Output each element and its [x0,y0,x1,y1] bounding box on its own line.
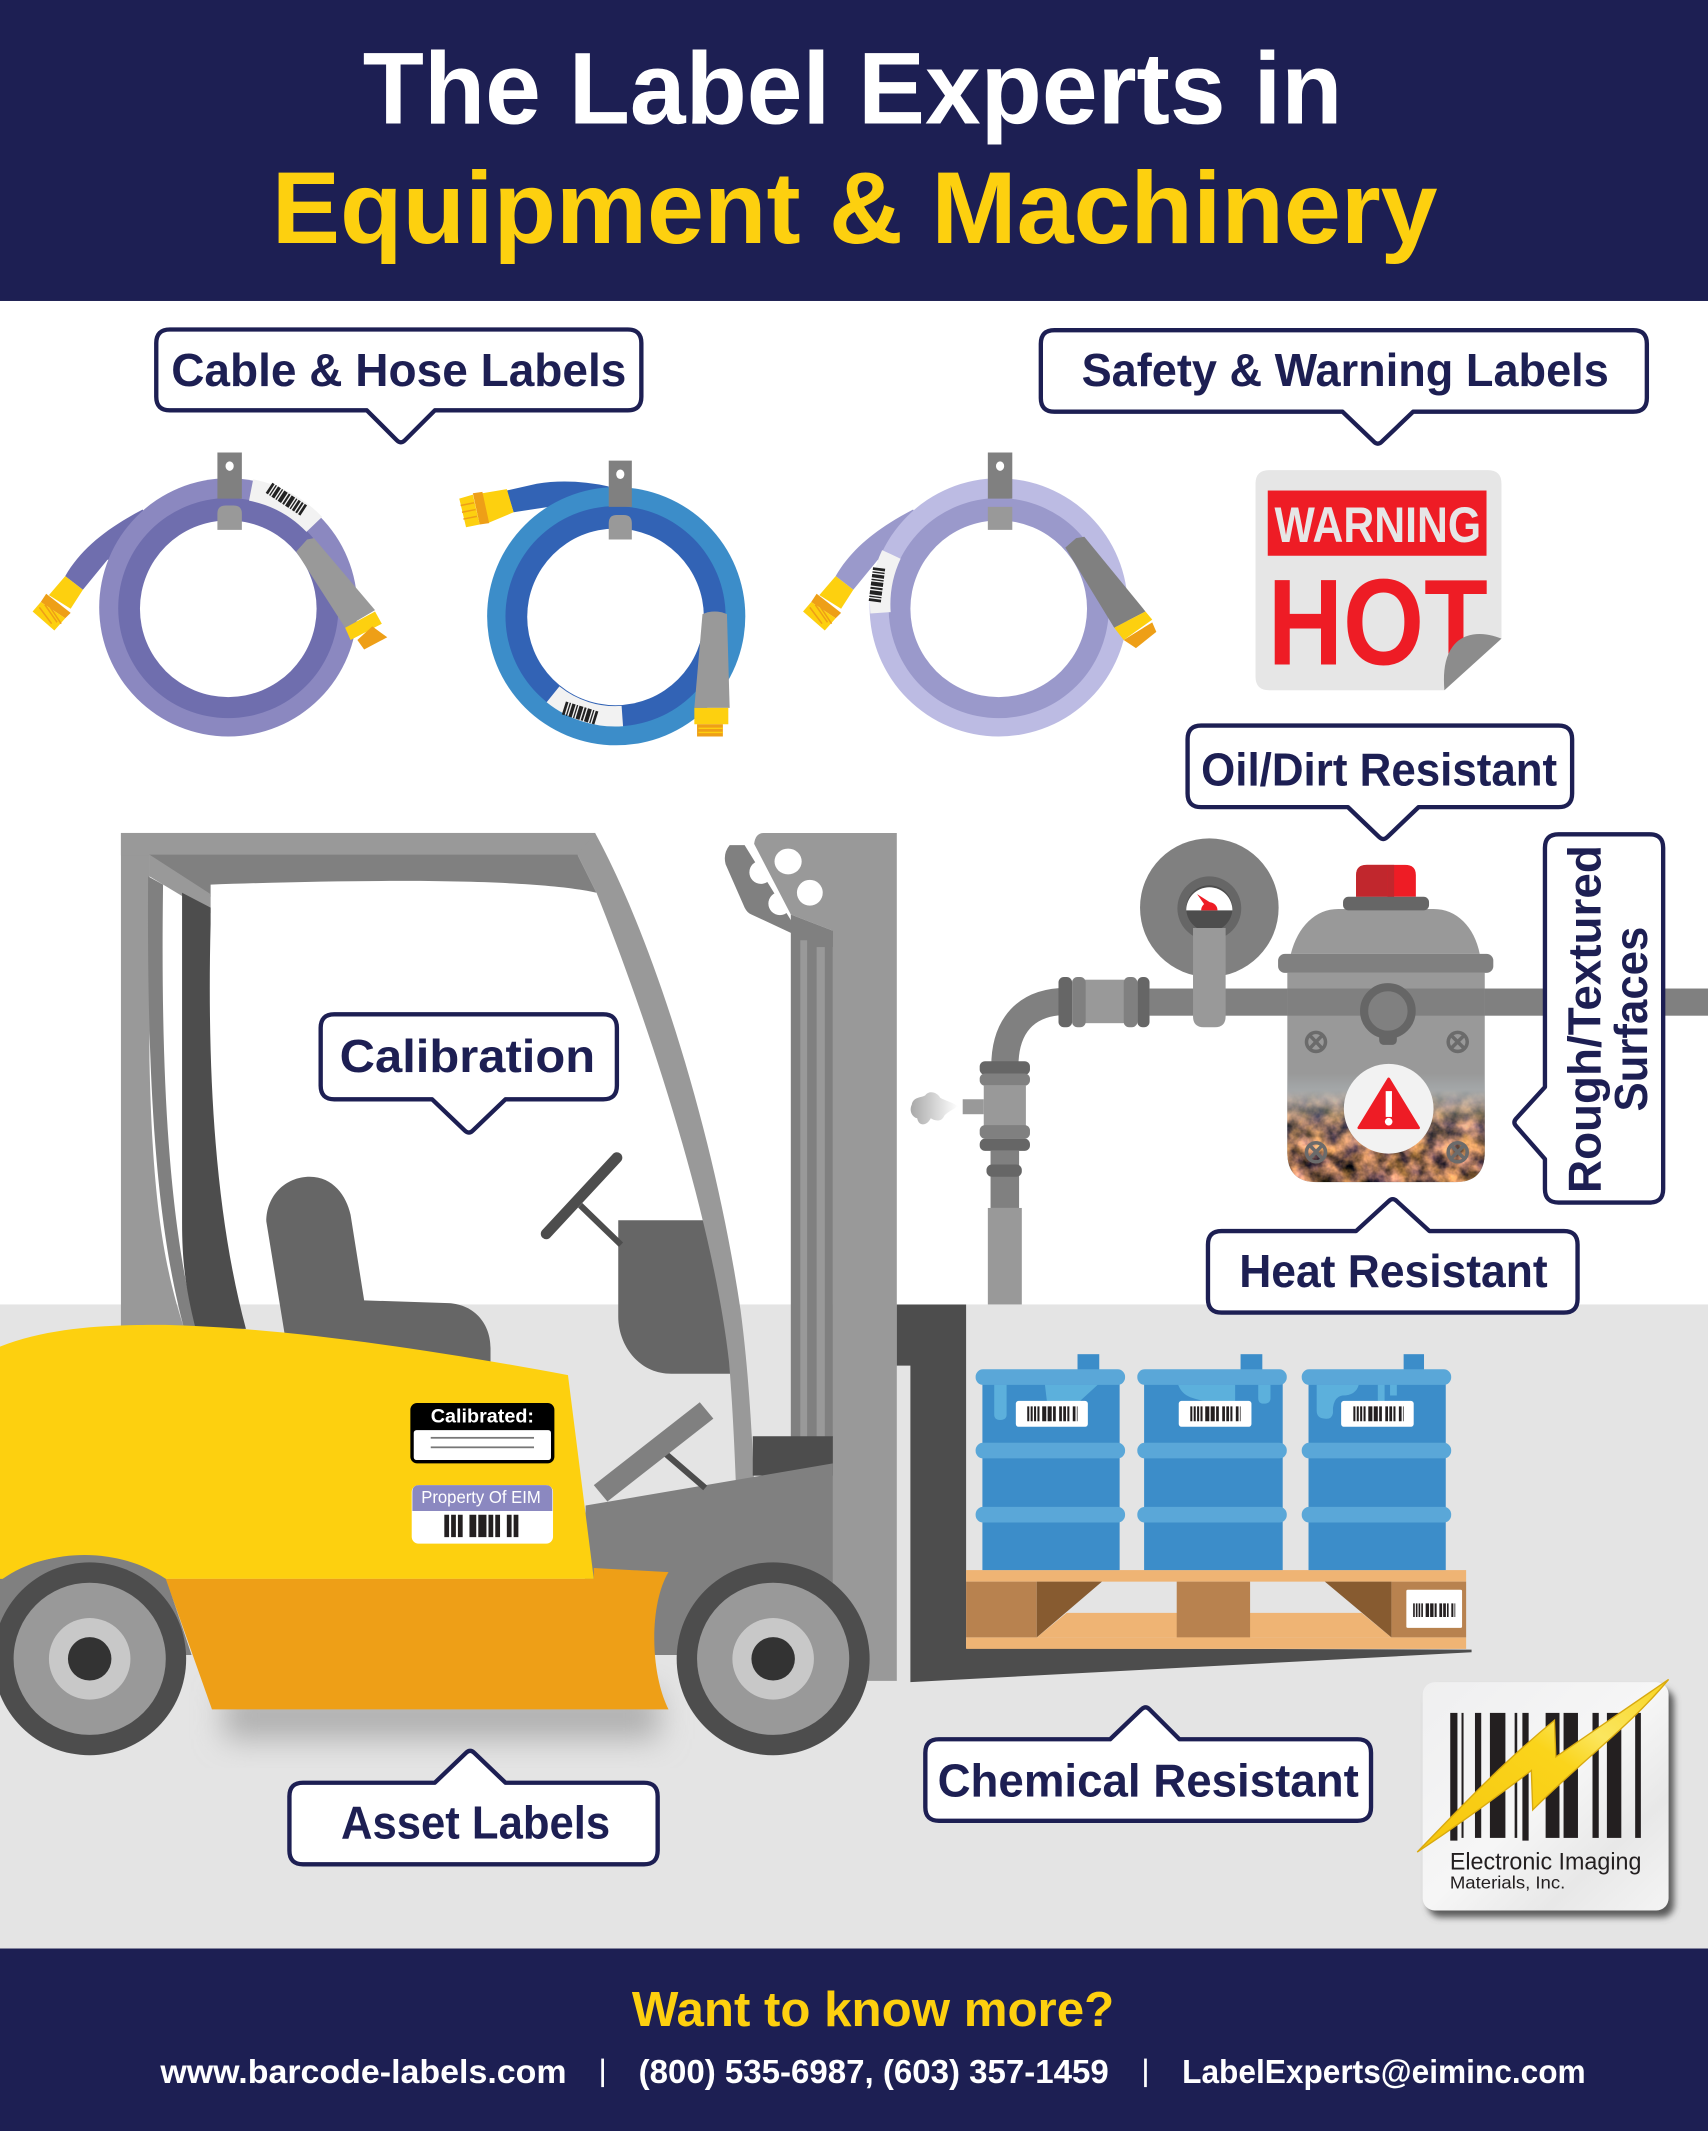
callout: oil and dirt resistant: Oil/Dirt Resistant [1201,743,1557,795]
seat [266,1177,491,1366]
divider 1 [601,2059,604,2087]
calibrated label [410,1403,554,1463]
warning HOT sticker [1256,470,1501,690]
red beacon [1356,865,1416,897]
divider 2 [1144,2059,1147,2087]
barrel 1 [976,1354,1125,1570]
callout: calibration [321,1014,617,1133]
forklift [0,833,897,1755]
wheel arch [0,1553,192,1655]
phone numbers: (800) 535-6987, (603) 357-1459 [639,2054,1109,2091]
front wheel [0,1562,186,1755]
company logo: Materials, Inc. [1450,1873,1565,1893]
title line 1: The Label Experts in [363,32,1342,146]
steam puff [911,1092,958,1124]
cab frame [121,833,754,1484]
email: LabelExperts@eiminc.com [1182,2054,1586,2091]
steam valve [963,1099,984,1114]
title line 2: Equipment & Machinery [272,151,1438,265]
rear wheel [677,1562,870,1755]
warning HOT sticker: WARNING [1275,496,1481,553]
warehouse floor [0,1304,1708,1950]
callout: safety and warning labels: Safety & Warning Labels [1082,344,1609,396]
header banner [0,0,1708,301]
barrel 2 [1137,1354,1287,1570]
pressure gauge [1140,838,1279,1027]
yellow body [0,1325,594,1579]
callout: oil and dirt resistant [1188,726,1572,839]
barrel 3 [1302,1354,1451,1570]
footer heading: Want to know more? [632,1983,1114,2037]
calibrated label: Calibrated: [431,1406,534,1428]
lower body [584,1463,833,1655]
callout: chemical resistant [925,1707,1371,1821]
hose 3: lavender [803,452,1156,736]
ground shadow [224,1692,659,1739]
callout: asset labels: Asset Labels [341,1796,610,1848]
callout: calibration: Calibration [340,1030,595,1082]
tank bolts [1306,1032,1467,1162]
callout: safety and warning labels [1041,330,1647,444]
callout: rough and textured surfaces: Surfaces [1605,927,1657,1111]
foot pedal [594,1402,713,1501]
logo lightning bolt [1417,1679,1669,1852]
callout: asset labels [289,1751,658,1864]
asset label [412,1485,553,1544]
hose 2: blue [459,461,745,745]
logo barcode [1450,1713,1641,1841]
company logo: Electronic Imaging [1450,1849,1641,1876]
orange skirt [166,1568,669,1709]
mast [725,833,897,1681]
callout: rough and textured surfaces: Rough/Textured [1559,845,1611,1193]
footer banner [0,1949,1708,2131]
steering column housing [618,1220,734,1374]
icon: warning triangle [1344,1064,1434,1154]
asset label: Property Of EIM [421,1487,541,1507]
callout: rough and textured surfaces [1514,834,1663,1203]
tank with rust patch [1278,865,1493,1184]
callout: cable and hose labels: Cable & Hose Labels [171,344,626,396]
warning HOT sticker: HOT [1268,553,1488,690]
steering wheel [546,1158,621,1245]
callout: chemical resistant: Chemical Resistant [938,1754,1359,1806]
pipework [963,977,1708,1304]
forklift forks [897,1304,1472,1682]
callout: heat resistant [1208,1199,1578,1313]
pallet [966,1570,1466,1649]
callout: heat resistant: Heat Resistant [1239,1245,1548,1297]
pallet barcode label [1406,1590,1462,1628]
callout: cable and hose labels [156,330,641,442]
hose 1: purple [33,452,387,736]
website: www.barcode-labels.com [159,2054,567,2091]
company logo [1417,1679,1674,1917]
